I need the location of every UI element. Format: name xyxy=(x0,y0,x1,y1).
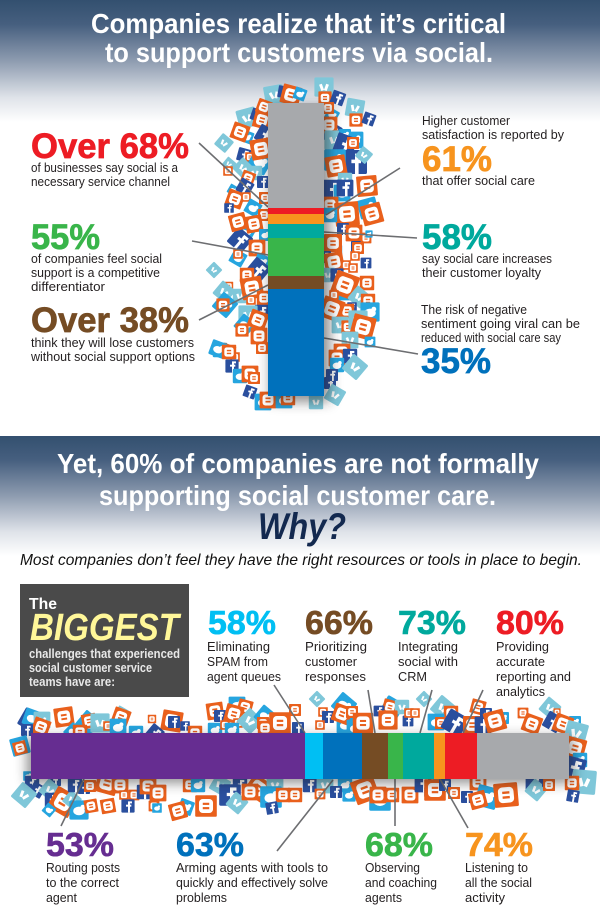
stat: 55%: of companies feel social xyxy=(31,252,162,266)
stat: 53%: Routing posts xyxy=(46,861,120,875)
stat: 61%: that offer social care xyxy=(422,174,535,188)
stat: 58% spam xyxy=(207,604,281,684)
title: companies realize xyxy=(91,8,506,68)
stat: 73%: Integrating xyxy=(398,640,458,654)
icon cloud: vertical bar xyxy=(206,77,384,410)
stat: 80%: 80% xyxy=(496,604,564,641)
stat: 35%: sentiment going viral can be xyxy=(421,317,580,331)
stat: 55%: support is a competitive xyxy=(31,266,160,280)
stat: 58% spam: SPAM from xyxy=(207,655,268,669)
leader lines: top panel xyxy=(192,143,418,354)
stat: 58% loyalty xyxy=(422,218,552,280)
stat: 63%: Arming agents with tools to xyxy=(176,861,328,875)
stat: 63% xyxy=(176,826,328,905)
stat: 35% xyxy=(421,303,580,381)
stacked bar: horizontal xyxy=(27,733,573,783)
stat: 66% xyxy=(305,604,373,684)
stat: 73%: 73% xyxy=(398,604,466,641)
stat: 66%: 66% xyxy=(305,604,373,641)
stat: 53%: to the correct xyxy=(46,876,120,890)
stat: 68%: agents xyxy=(365,891,402,905)
stat: 58% loyalty: their customer loyalty xyxy=(422,266,542,280)
stat: 61%: Higher customer xyxy=(422,114,510,128)
stat: over 68%: necessary service channel xyxy=(31,175,170,189)
stat: over 68% xyxy=(31,127,189,189)
stat: 58% loyalty: 58% xyxy=(422,218,492,257)
stat: over 68%: of businesses say social is a xyxy=(31,161,178,175)
stat: 58% loyalty: say social care increases xyxy=(422,252,552,266)
stat: 58% spam: 58% xyxy=(208,604,276,641)
header band: top xyxy=(0,0,600,122)
stat: 73%: social with xyxy=(398,655,458,669)
stat: 66%: Prioritizing xyxy=(305,640,367,654)
stat: 61%: satisfaction is reported by xyxy=(422,128,565,142)
stat: 63%: quickly and effectively solve xyxy=(176,876,328,890)
stat: over 38%: without social support options xyxy=(30,350,195,364)
callout: the biggest challenges: teams have are: xyxy=(29,675,115,689)
icon cloud: horizontal bar xyxy=(9,691,597,821)
callout: the biggest challenges: BIGGEST xyxy=(30,607,181,649)
subheading: Most companies don’t feel they have the right resources or tools in place to begin. xyxy=(20,552,582,569)
stat: 74%: Listening to xyxy=(465,861,528,875)
title: 60% of companies: Yet, 60% of companies are not formally xyxy=(57,448,540,479)
stat: 63%: problems xyxy=(176,891,227,905)
title: companies realize: Companies realize that it’s critical xyxy=(91,8,506,39)
stat: 80%: accurate xyxy=(496,655,545,669)
header band: why xyxy=(0,436,600,556)
title: companies realize: to support customers via social. xyxy=(105,37,493,68)
stacked bar: vertical xyxy=(268,103,330,402)
stat: 80%: reporting and xyxy=(496,670,571,684)
stat: over 38% xyxy=(30,301,195,364)
stat: 35%: reduced with social care say xyxy=(421,331,562,345)
stat: 68% xyxy=(365,826,437,905)
stat: 55% xyxy=(31,218,162,294)
stat: over 38%: think they will lose customers xyxy=(31,336,194,350)
stat: 66%: responses xyxy=(305,670,366,684)
stat: 80% xyxy=(496,604,571,699)
stat: 68%: and coaching xyxy=(365,876,437,890)
callout: the biggest challenges: social customer service xyxy=(29,661,152,675)
stat: 68%: 68% xyxy=(365,826,433,863)
stat: 55%: 55% xyxy=(31,218,100,257)
stat: 74%: 74% xyxy=(465,826,533,863)
stat: 53%: agent xyxy=(46,891,78,905)
stat: 80%: analytics xyxy=(496,685,545,699)
stat: 58% spam: Eliminating xyxy=(207,640,270,654)
stat: over 68%: Over 68% xyxy=(31,127,189,166)
title: 60% of companies xyxy=(57,448,540,511)
stat: 55%: differentiator xyxy=(31,280,105,294)
stat: 74%: all the social xyxy=(465,876,532,890)
leader lines: bottom panel xyxy=(61,685,483,851)
callout: the biggest challenges: The xyxy=(29,596,57,613)
stat: 35%: The risk of negative xyxy=(421,303,527,317)
title: 60% of companies: supporting social customer care. xyxy=(99,480,496,511)
stat: 35%: 35% xyxy=(421,342,491,381)
stat: 68%: Observing xyxy=(365,861,420,875)
callout: the biggest challenges: challenges that experienced xyxy=(29,647,180,661)
stat: 74% xyxy=(465,826,533,905)
stat: 53%: 53% xyxy=(46,826,114,863)
stat: 80%: Providing xyxy=(496,640,549,654)
stat: 73% xyxy=(398,604,466,684)
stat: 63%: 63% xyxy=(176,826,244,863)
stat: 66%: customer xyxy=(305,655,357,669)
callout: the biggest challenges xyxy=(20,584,189,697)
stat: 61%: 61% xyxy=(422,140,492,179)
stat: over 38%: Over 38% xyxy=(31,301,189,340)
stat: 73%: CRM xyxy=(398,670,427,684)
stat: 74%: activity xyxy=(465,891,506,905)
heading: why?: Why? xyxy=(258,506,346,547)
stat: 53% xyxy=(46,826,120,905)
stat: 61% xyxy=(422,114,565,188)
stat: 58% spam: agent queues xyxy=(207,670,281,684)
